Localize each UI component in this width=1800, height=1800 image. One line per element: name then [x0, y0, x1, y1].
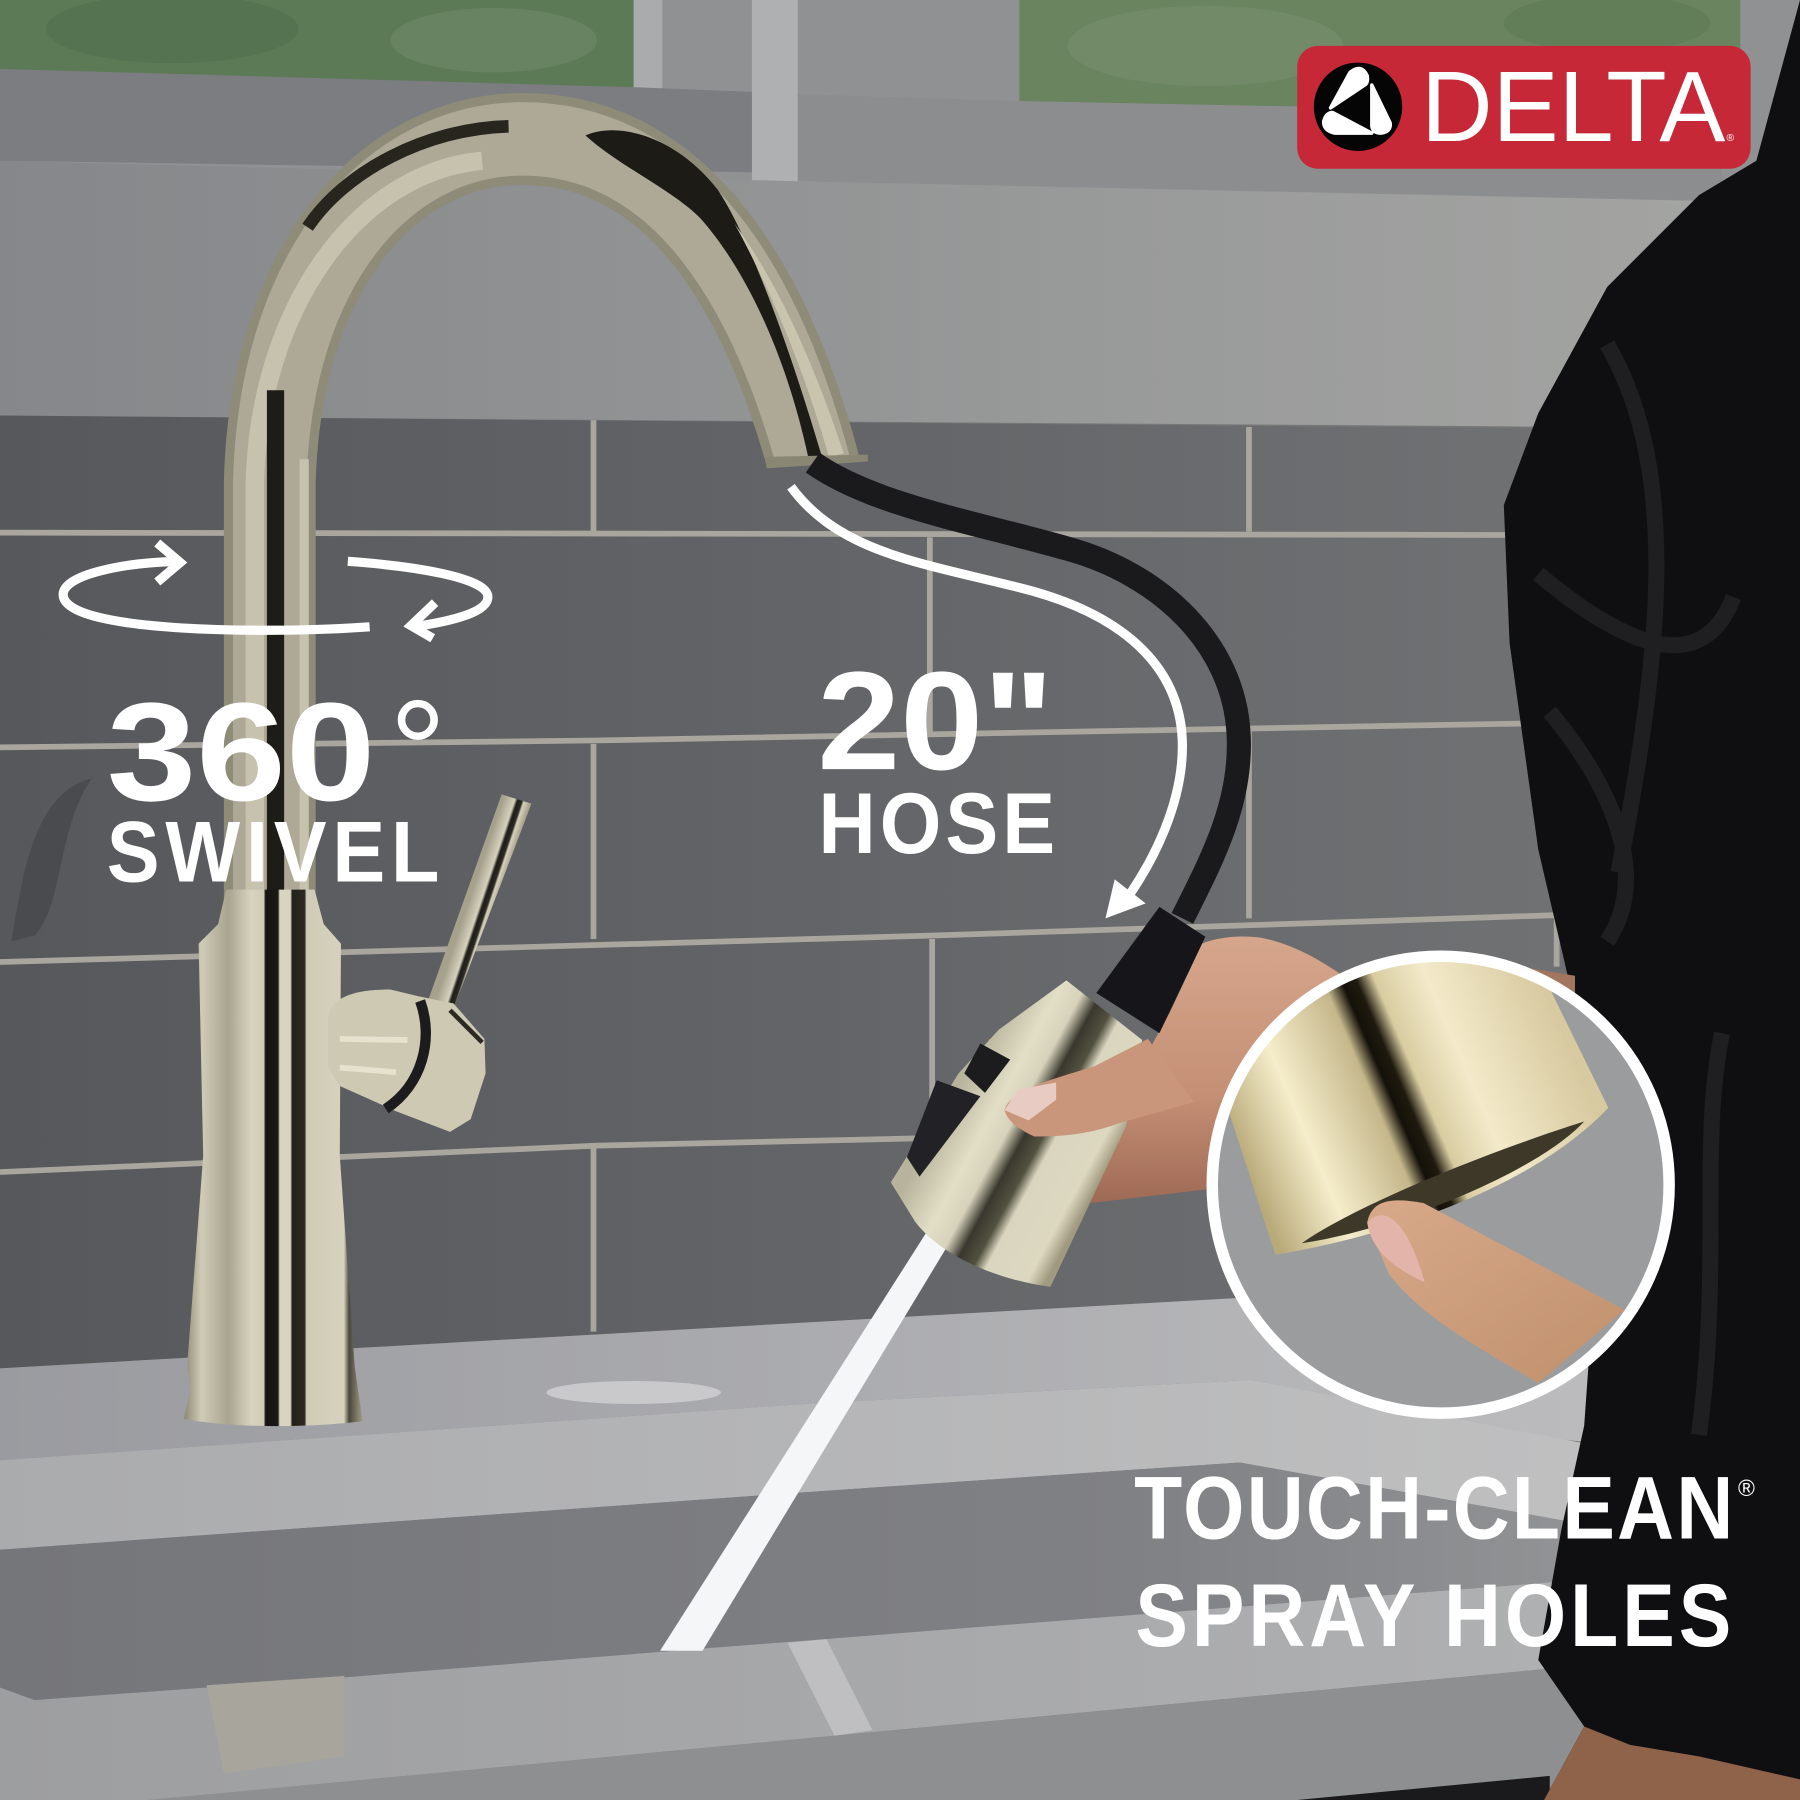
- magnified spray holes callout: [1194, 918, 1669, 1413]
- faucet base body: [184, 890, 363, 1426]
- countertop and sink: [0, 1297, 1630, 1800]
- faucet handle: [328, 794, 532, 1132]
- icon: Delta logo: [1314, 63, 1402, 151]
- label: Touch-Clean spray holes: SPRAY HOLES: [1135, 1565, 1731, 1665]
- hand holding sprayer: [988, 937, 1343, 1203]
- label: 20 inch hose: [817, 642, 1055, 872]
- label: Touch-Clean spray holes: [1134, 1458, 1755, 1665]
- thumb: [1004, 1039, 1194, 1136]
- label: 20 inch hose: 20": [817, 642, 1054, 799]
- hose length arrow: [791, 487, 1182, 918]
- faucet spout arc: [255, 126, 868, 918]
- subway tile backsplash: [0, 416, 1607, 1368]
- label: Touch-Clean spray holes: TOUCH-CLEAN: [1134, 1458, 1733, 1557]
- wordmark: DELTA: [1421, 52, 1726, 163]
- pull-down hose: [813, 463, 1239, 918]
- label: 360 degree swivel: 360: [107, 673, 375, 830]
- gold spray face: [1230, 962, 1608, 1255]
- label: 360 degree swivel: °: [389, 671, 447, 831]
- water stream: [660, 1231, 947, 1651]
- label: 360 degree swivel: SWIVEL: [107, 804, 439, 900]
- spray head: [891, 907, 1205, 1287]
- painted wall: [0, 69, 1722, 427]
- label: 360 degree swivel: [107, 671, 447, 900]
- faucet: [184, 126, 868, 1426]
- brand badge: Delta: [1297, 46, 1751, 169]
- brand badge: Delta: ®: [1727, 133, 1735, 144]
- swivel rotation arrows: [63, 543, 488, 638]
- fingertip: [1367, 1200, 1624, 1383]
- woman in black lace top: [1504, 0, 1800, 1800]
- label: Touch-Clean spray holes: ®: [1738, 1475, 1755, 1501]
- label: 20 inch hose: HOSE: [818, 775, 1055, 872]
- window with garden view: [0, 0, 1800, 230]
